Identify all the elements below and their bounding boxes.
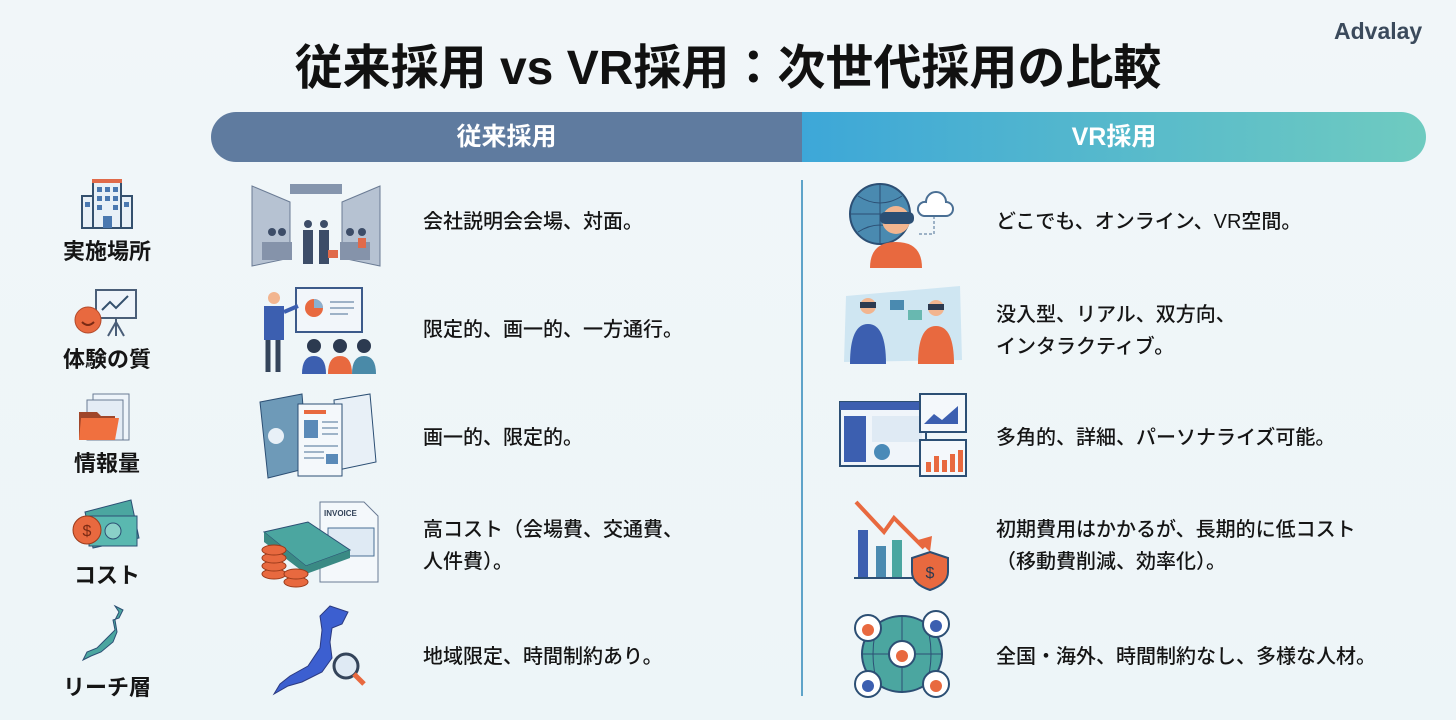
row 4 VR icon: falling cost chart with shield: $ xyxy=(926,565,935,582)
row 1 label: 実施場所 xyxy=(63,179,151,264)
icon: smile and chart board xyxy=(74,289,137,336)
row 2 VR text xyxy=(996,304,1236,358)
row 1 traditional icon: venue meeting xyxy=(252,184,380,267)
icon: folder xyxy=(79,394,130,440)
row 4 traditional text xyxy=(423,518,683,573)
label text: コスト xyxy=(74,563,140,588)
header: traditional: 従来採用 xyxy=(456,123,556,151)
row 3 traditional icon: documents xyxy=(259,393,376,479)
row 2 traditional icon: presenter xyxy=(264,287,376,374)
icon: building xyxy=(81,179,133,229)
row 4 traditional text: 高コスト（会場費、交通費、 xyxy=(423,519,683,541)
row 5 traditional text: 地域限定、時間制約あり。 xyxy=(423,646,663,668)
header: VR: VR採用 xyxy=(1072,123,1156,151)
header: VR xyxy=(802,112,1426,162)
row 4 label: コスト xyxy=(72,499,140,588)
header bar xyxy=(211,112,1426,162)
row 2 VR text: インタラクティブ。 xyxy=(996,336,1174,358)
row 5 VR text: 全国・海外、時間制約なし、多様な人材。 xyxy=(996,646,1376,668)
row 2 VR text: 没入型、リアル、双方向、 xyxy=(996,304,1236,326)
row 2 traditional text: 限定的、画一的、一方通行。 xyxy=(423,319,683,341)
icon: japan map xyxy=(82,604,124,662)
row 1 VR text: どこでも、オンライン、VR空間。 xyxy=(996,211,1301,233)
row 2 VR icon: two people in VR xyxy=(844,286,962,364)
row 3 VR text: 多角的、詳細、パーソナライズ可能。 xyxy=(996,427,1335,449)
row 4 VR text: （移動費削減、効率化）。 xyxy=(996,551,1226,573)
title: 従来採用 vs VR採用：次世代採用の比較 xyxy=(295,42,1161,95)
row 3 traditional text: 画一的、限定的。 xyxy=(423,427,583,449)
row 4 traditional text: 人件費）。 xyxy=(423,551,513,573)
header: traditional xyxy=(211,112,802,162)
row 1 VR icon: globe with VR headset person xyxy=(849,183,954,268)
row 5 VR icon: globe with people xyxy=(854,610,950,698)
divider line xyxy=(801,180,803,696)
row 2 label: 体験の質 xyxy=(63,289,151,372)
row 5 traditional icon: japan map with magnifier xyxy=(272,605,366,696)
row 4 VR icon: falling cost chart with shield xyxy=(854,500,949,591)
icon: money xyxy=(72,499,140,549)
row 3 label: 情報量 xyxy=(74,394,140,476)
brand logo: Advalay xyxy=(1334,18,1422,44)
row 4 VR text: 初期費用はかかるが、長期的に低コスト xyxy=(996,519,1356,541)
row 1 traditional text: 会社説明会会場、対面。 xyxy=(423,211,643,233)
label text: リーチ層 xyxy=(63,675,151,700)
row 5 label: リーチ層 xyxy=(63,604,151,700)
row 4 traditional icon: invoice and cash: INVOICE xyxy=(324,509,358,518)
row 4 VR text xyxy=(996,518,1356,573)
label text: 体験の質 xyxy=(63,347,151,372)
label text: 実施場所 xyxy=(63,239,151,264)
icon: money: $ xyxy=(83,523,92,540)
row 3 VR icon: dashboard xyxy=(839,393,967,477)
label text: 情報量 xyxy=(74,451,140,476)
row 4 traditional icon: invoice and cash xyxy=(262,502,378,588)
